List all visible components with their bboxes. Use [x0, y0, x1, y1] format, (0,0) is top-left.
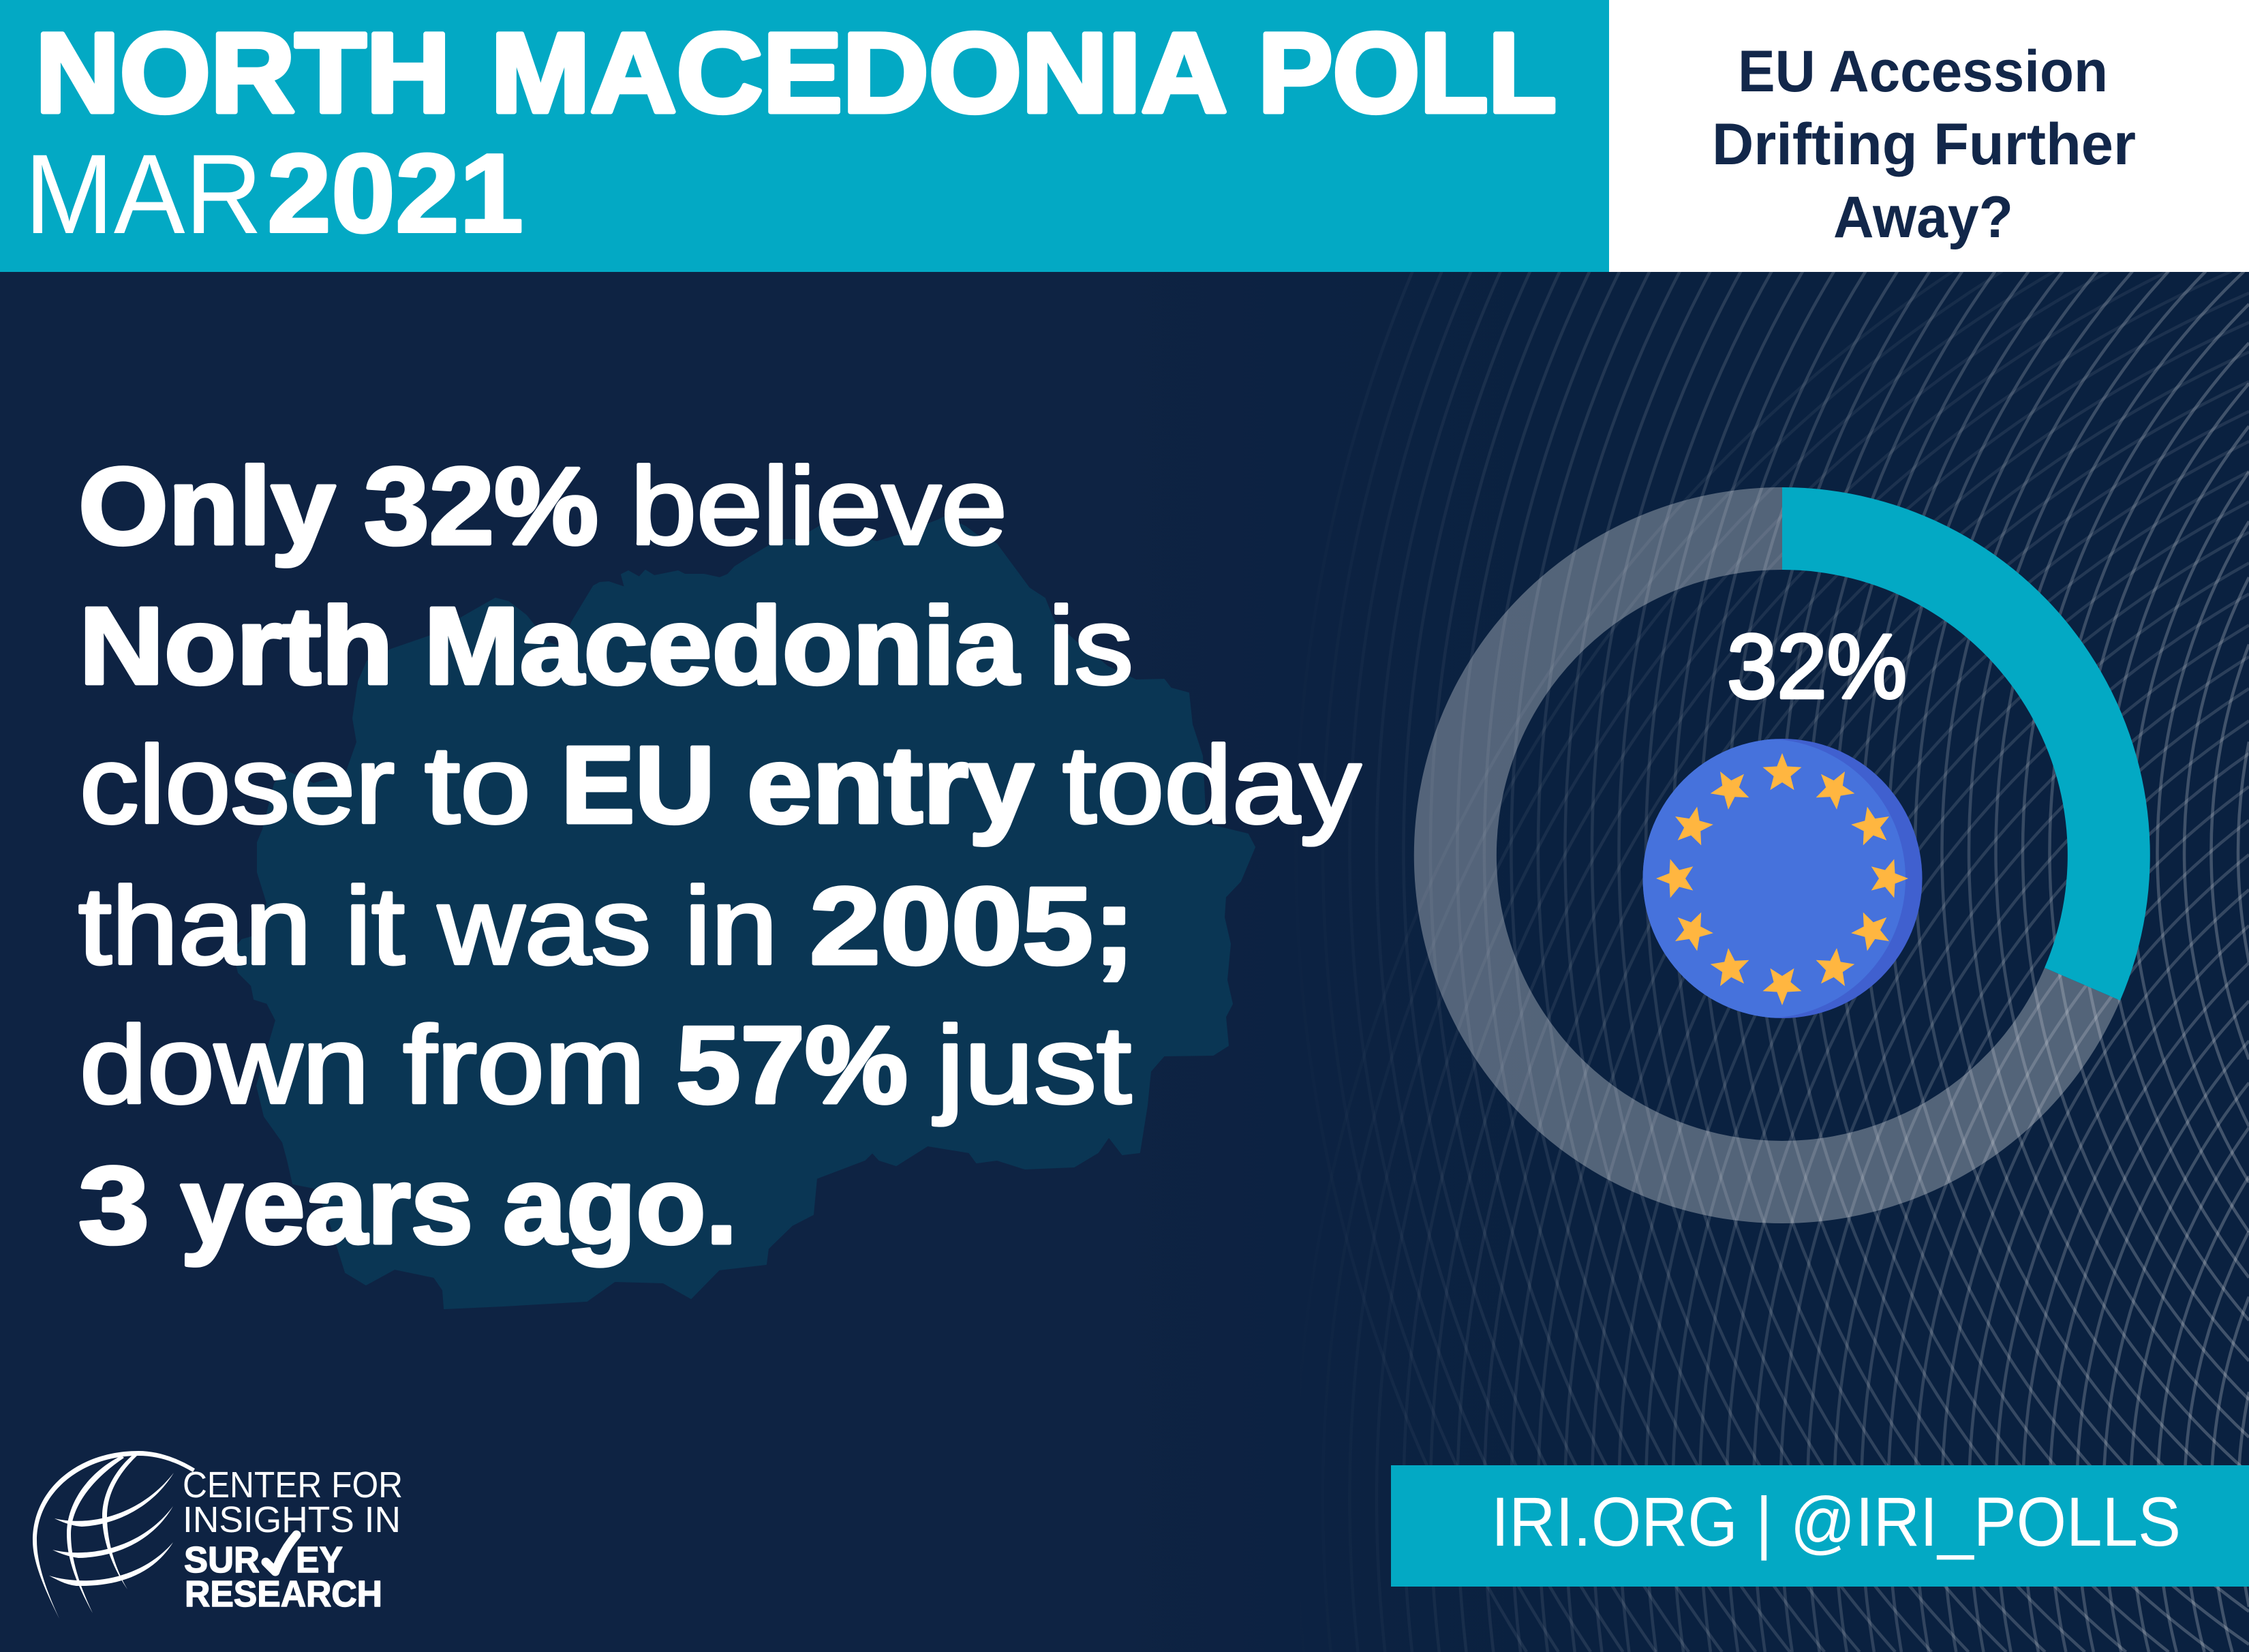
logo wordmark: CENTER FOR [183, 1465, 403, 1505]
main statement: entry [747, 724, 1034, 846]
main statement: 3 [78, 1144, 149, 1267]
footer link bar [1391, 1465, 2249, 1587]
date line [25, 131, 523, 258]
main statement: EU [561, 724, 715, 846]
subtitle text: Drifting Further [1712, 112, 2136, 177]
main statement: just [933, 1004, 1131, 1127]
donut value: 32% [1727, 616, 1907, 718]
subtitle text: EU Accession [1738, 39, 2108, 104]
title: POLL [1258, 10, 1557, 136]
main statement: to [425, 724, 531, 846]
logo wordmark: EY [296, 1540, 343, 1580]
links text: IRI.ORG | @IRI_POLLS [1491, 1483, 2181, 1561]
title [35, 10, 1557, 136]
main statement [78, 445, 1362, 1267]
subtitle panel [1609, 0, 2249, 272]
main statement: 32% [364, 445, 598, 568]
subtitle text: Away? [1833, 185, 2013, 250]
32 percent share of ring [1782, 487, 2150, 1000]
main statement: closer [80, 724, 395, 846]
logo wordmark: INSIGHTS IN [183, 1499, 401, 1540]
remaining share of ring [1414, 487, 2120, 1223]
map of North Macedonia [233, 517, 1255, 1309]
logo wordmark: SUR [184, 1540, 260, 1580]
main statement: Macedonia [424, 585, 1020, 707]
main statement: down from [80, 1004, 645, 1127]
date line: MAR [25, 132, 262, 258]
main statement: Only [78, 445, 335, 568]
icon: check mark [266, 1535, 296, 1572]
header band [0, 0, 1609, 272]
main statement: 57% [676, 1004, 908, 1127]
main statement: believe [630, 445, 1007, 568]
logo wordmark: RESEARCH [185, 1574, 382, 1615]
donut chart [1414, 487, 2150, 1223]
main statement: years [181, 1144, 473, 1267]
logo wordmark [183, 1465, 403, 1615]
main statement: 2005; [810, 865, 1135, 988]
subtitle text [1712, 39, 2136, 250]
main statement: today [1062, 724, 1362, 846]
main statement: than it was in [78, 865, 778, 988]
title: MACEDONIA [491, 10, 1227, 136]
icon: EU flag coin [1626, 739, 1922, 1018]
title: NORTH [35, 10, 450, 136]
main statement: is [1048, 585, 1133, 707]
logo: Center for Insights in Survey Research [33, 1451, 403, 1619]
main statement: North [79, 585, 393, 707]
main statement: ago. [503, 1144, 737, 1267]
date line: 2021 [267, 131, 523, 256]
icon: globe [33, 1451, 195, 1619]
